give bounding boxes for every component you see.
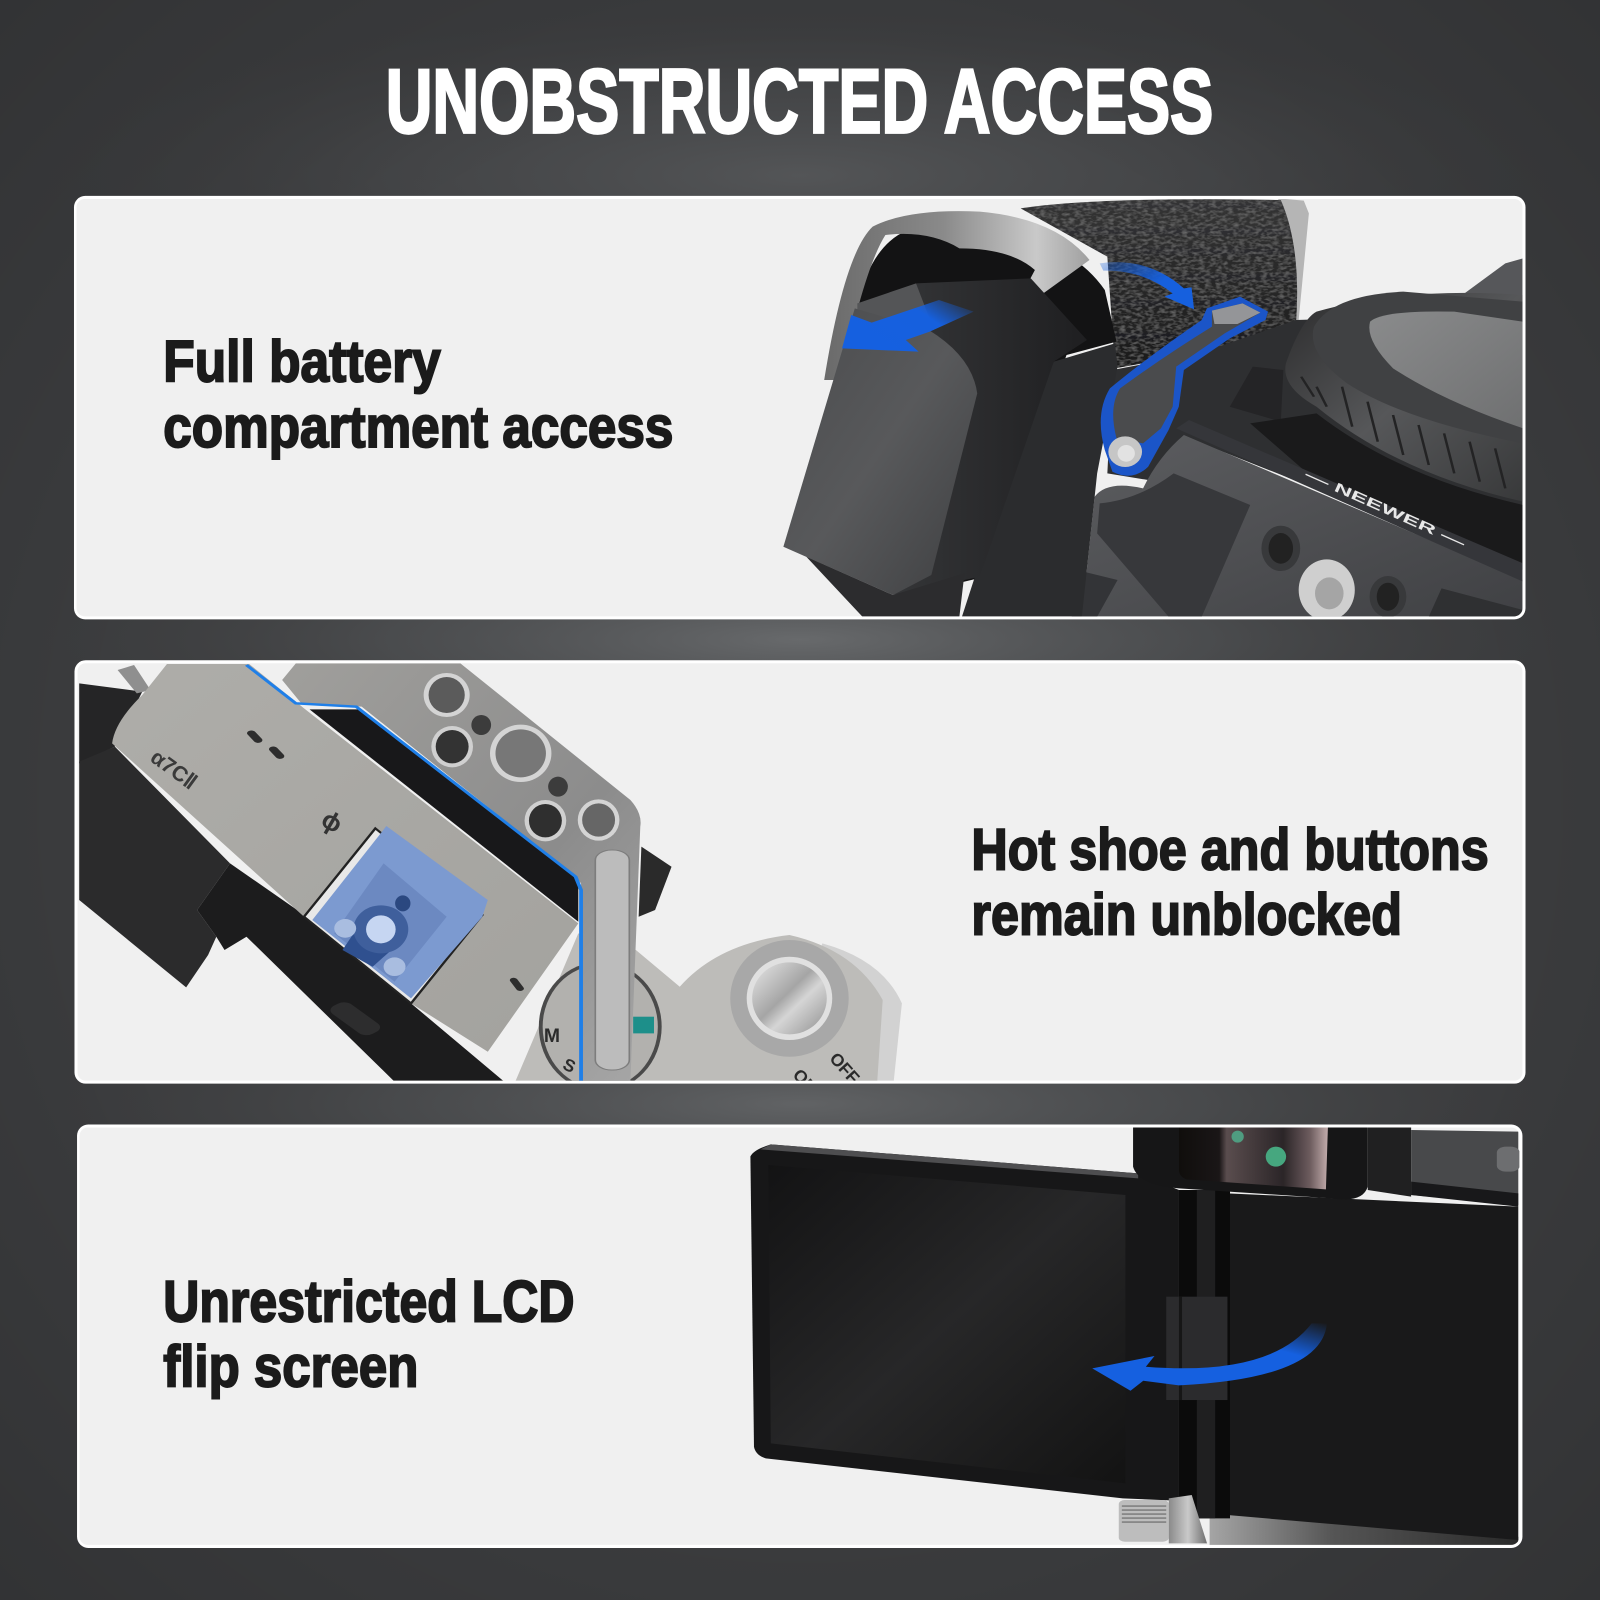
hinge column: [1166, 1190, 1230, 1518]
rear block: [1465, 258, 1522, 302]
heading: hot shoe and buttons remain unblocked: Hot shoe and buttons: [971, 817, 1489, 882]
model name: α7CⅡ: [146, 745, 201, 794]
heading: unrestricted LCD flip screen: [163, 1269, 574, 1400]
metal cage plate: [1072, 420, 1523, 621]
black screw behind arm: [639, 847, 672, 917]
top right controls: [1368, 1127, 1520, 1207]
bottom metal strip: [1210, 1515, 1518, 1545]
heading: unrestricted LCD flip screen: flip screen: [163, 1335, 418, 1400]
blue cage outline: [246, 665, 581, 1082]
blue release lever: [1101, 297, 1268, 476]
heading: hot shoe and buttons remain unblocked: [971, 817, 1489, 948]
eyecup and rear body: [79, 665, 504, 1082]
grip with leather texture: [1021, 198, 1309, 368]
black rear flap: [962, 343, 1118, 617]
camera back: [1227, 1193, 1518, 1540]
camera illustration with battery door open: [783, 198, 1523, 621]
LCD panel: [750, 1144, 1179, 1501]
small knob: [1230, 367, 1283, 422]
dark body under the cap: [1250, 413, 1523, 570]
panel: hot shoe and buttons: [74, 660, 1526, 1098]
heading: full battery compartment access: compartment access: [163, 395, 673, 460]
dial label OFF: OFF: [826, 1048, 864, 1088]
flip screen camera illustration: [750, 1125, 1520, 1545]
battery: [783, 278, 1087, 617]
right shutter dial base: [515, 933, 902, 1082]
viewfinder eyecup: [1133, 1125, 1368, 1199]
arrow: screen flip: [1092, 1323, 1327, 1391]
cage holes: [424, 673, 619, 841]
left mode dial: [538, 966, 662, 1081]
panel: battery compartment: [74, 196, 1526, 621]
silver top plate: [112, 664, 578, 1052]
silver cage arm: [282, 663, 641, 1082]
heading: hot shoe and buttons remain unblocked: remain unblocked: [971, 883, 1402, 948]
battery door interior: [859, 234, 1116, 582]
arrow: battery removal: [842, 300, 974, 352]
mode dial letter S: S: [560, 1054, 579, 1077]
black gap below cage: [310, 709, 578, 922]
title: UNOBSTRUCTED ACCESS: [386, 52, 1213, 153]
knurled screw: [1119, 1495, 1207, 1543]
heading: full battery compartment access: [163, 330, 673, 460]
heading: unrestricted LCD flip screen: Unrestricted LCD: [163, 1269, 574, 1334]
arrow: lever rotation: [1100, 262, 1194, 309]
brand text on cage: — NEEWER —: [1303, 467, 1469, 551]
camera top plate: [1107, 320, 1522, 520]
heading: full battery compartment access: Full battery: [163, 330, 441, 395]
panel: LCD flip screen: [77, 1124, 1522, 1548]
door gray arch: [824, 211, 1089, 380]
dial label ON: ON: [789, 1065, 821, 1098]
highlighted hot shoe: [304, 826, 488, 1003]
camera top view illustration: [79, 663, 902, 1098]
top plate markings: [245, 730, 525, 992]
mode dial letter M: M: [544, 1025, 560, 1047]
focal plane mark: ϕ: [316, 805, 347, 839]
body cap: [1285, 292, 1523, 502]
